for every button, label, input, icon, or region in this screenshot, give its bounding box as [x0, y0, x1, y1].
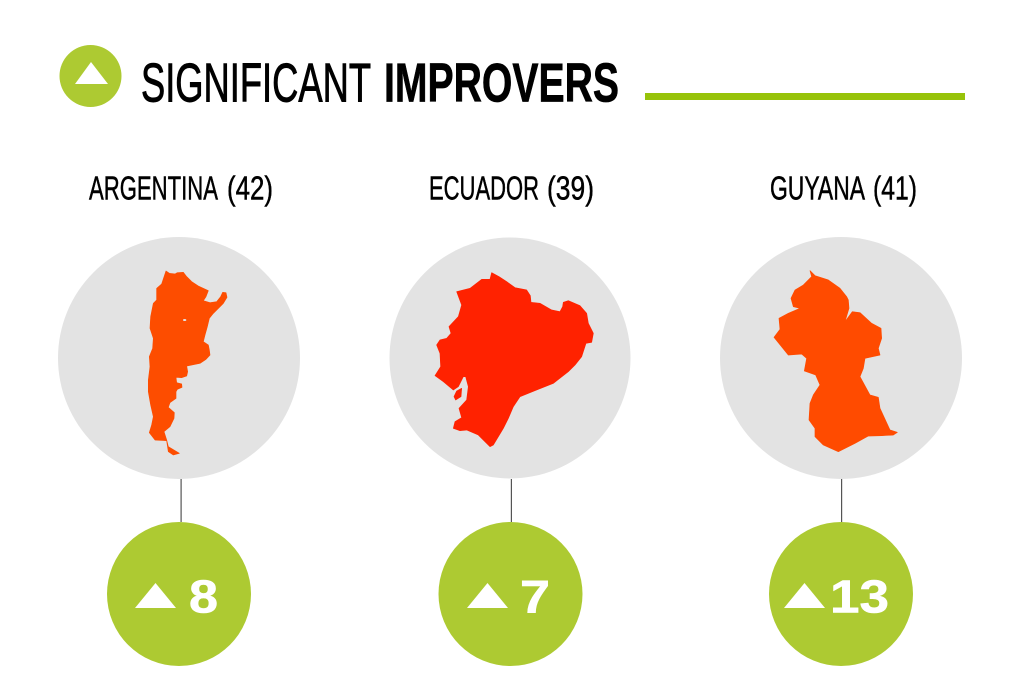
score badge: Guyana — [769, 522, 913, 666]
map circle: Ecuador — [390, 238, 630, 478]
title emphasis: IMPROVERS — [384, 52, 619, 114]
score badge: Ecuador: 7 — [520, 570, 550, 622]
icon: header up triangle badge — [60, 45, 122, 107]
score badge: Guyana: 13 — [830, 570, 889, 622]
heading: Guyana: GUYANA — [770, 170, 865, 206]
connector: Ecuador — [511, 479, 512, 522]
score badge: Argentina: 8 — [189, 570, 218, 622]
connector: Argentina — [180, 479, 182, 522]
connector: Guyana — [841, 479, 842, 522]
panel: Argentina — [58, 170, 300, 666]
map circle: Argentina — [58, 237, 300, 479]
heading: Argentina: ARGENTINA — [89, 170, 218, 206]
score badge: Ecuador — [438, 522, 582, 666]
header — [60, 45, 965, 114]
heading: Argentina: (42) — [227, 170, 273, 206]
header rule — [645, 93, 965, 100]
heading: Guyana: (41) — [873, 170, 917, 206]
title: SIGNIFICANT — [141, 52, 371, 114]
map circle: Guyana — [720, 237, 962, 479]
panel: Ecuador — [390, 170, 630, 666]
panel: Guyana — [720, 170, 962, 666]
heading: Ecuador: ECUADOR — [429, 170, 539, 206]
score badge: Argentina — [107, 522, 251, 666]
heading: Ecuador: (39) — [547, 170, 594, 206]
